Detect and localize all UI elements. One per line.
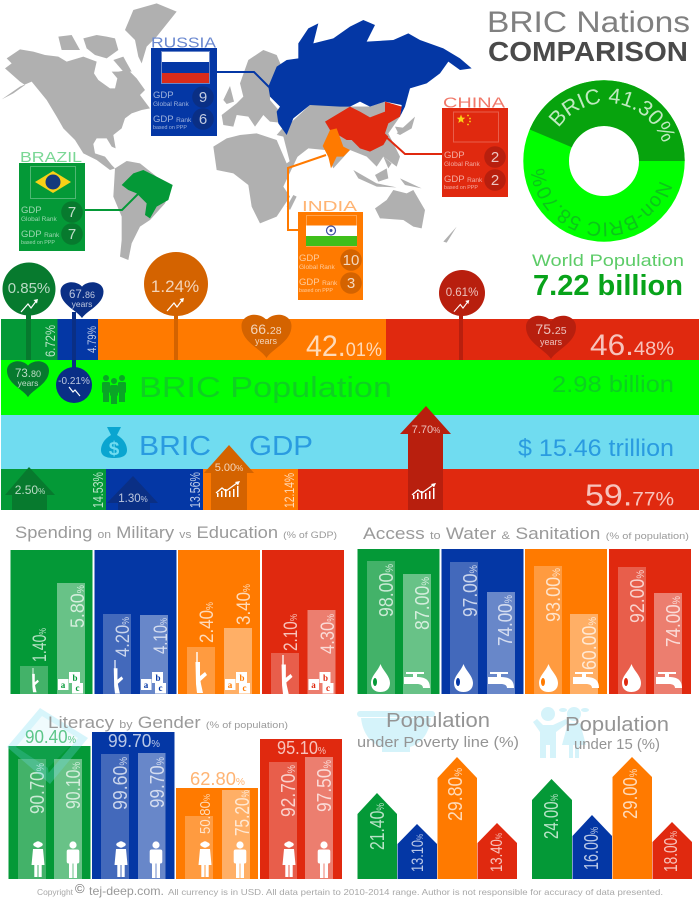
GDP growth arrow: Brazil	[5, 467, 55, 510]
life expectancy heart: China: 75.25	[535, 321, 567, 337]
chart: population under 15: 24.00%	[541, 794, 563, 839]
life expectancy heart: Brazil: years	[18, 378, 38, 388]
panel: military vs education spending: 3.40%	[234, 584, 255, 625]
card: India: 10	[343, 252, 359, 269]
icon: abc blocks Brazil: a	[61, 680, 66, 690]
icon: abc blocks China: b	[323, 673, 328, 683]
footer: All currency is in USD. All data pertain to 2010-2014 range. Author is not responsible for accuracy of data presented.	[168, 887, 663, 897]
icon: abc blocks India: b	[239, 673, 245, 683]
title	[487, 6, 690, 67]
chart: population under 15: 18.00%	[661, 831, 681, 872]
card: Russia: based on PPP	[153, 125, 187, 131]
world population total: World Population	[532, 252, 684, 270]
life expectancy heart: Russia	[60, 282, 104, 368]
world population total	[532, 252, 684, 302]
GDP growth arrow: Russia	[107, 476, 158, 510]
card: Russia: Global Rank	[153, 101, 190, 108]
GDP share bar: 13.56%	[187, 472, 204, 508]
panel: literacy by gender: 99.60%	[110, 757, 132, 810]
growth marker: China population: 0.61%	[446, 287, 478, 299]
card: China	[442, 96, 508, 197]
connector: China	[385, 136, 442, 154]
world map	[2, 3, 472, 260]
panel: military vs education spending: 2.40%	[197, 602, 218, 643]
icon: abc blocks India: a	[228, 680, 233, 690]
panel: literacy by gender: 90.10%	[63, 762, 85, 809]
panel: water and sanitation access: 98.00%	[376, 564, 398, 617]
world population total: 7.22 billion	[533, 270, 683, 302]
Brazil territory	[122, 170, 173, 218]
life expectancy heart: China	[526, 316, 576, 359]
card: Russia: 9	[199, 89, 207, 106]
donut chart: world population share	[523, 80, 685, 242]
icon: children watermark	[533, 707, 589, 758]
flag: Brazil	[30, 166, 76, 198]
panel: water and sanitation access: 92.00%	[627, 570, 649, 623]
heading: poverty	[357, 710, 519, 751]
footer: tej-deep.com.	[89, 884, 164, 898]
life expectancy heart: India: 66.28	[250, 321, 282, 337]
panel: literacy by gender: 99.70%	[147, 757, 169, 808]
chart: population under poverty line	[358, 757, 517, 879]
band: BRIC GDP: $ 15.46 trillion	[518, 435, 674, 462]
life expectancy heart: Russia: 67.86	[69, 289, 95, 301]
card: Russia: GDP Rank	[153, 114, 192, 125]
panel: water and sanitation access: 93.00%	[543, 568, 565, 622]
icon: abc blocks India	[225, 672, 250, 694]
icon: bowl watermark	[357, 711, 435, 752]
card: India: GDP	[299, 253, 320, 264]
icon: abc blocks Brazil: c	[76, 683, 80, 693]
card: China: based on PPP	[444, 185, 478, 191]
chart: population under 15: 16.00%	[581, 827, 603, 870]
panel: military vs education spending: 4.10%	[151, 618, 172, 654]
footer: ©	[75, 881, 85, 896]
band: BRIC population	[1, 360, 699, 415]
donut chart: world population share: BRIC 41.30%	[548, 88, 675, 142]
card: China: GDP	[444, 150, 465, 161]
card: Brazil: 7	[68, 204, 76, 221]
icon: abc blocks India: c	[242, 683, 246, 693]
icon: drop and tap Brazil	[371, 664, 430, 692]
card: China: 2	[491, 172, 499, 189]
heading: under 15	[565, 714, 669, 753]
growth marker: Russia population: -0.21%	[58, 376, 90, 387]
card: India: GDP Rank	[299, 277, 338, 288]
life expectancy heart: Brazil	[7, 361, 49, 397]
card: Brazil: BRAZIL	[20, 150, 82, 166]
growth marker: India population	[144, 252, 208, 360]
GDP share bar: 12.14%	[281, 473, 297, 508]
population share bar: 42.01%	[306, 330, 382, 363]
icon: abc blocks China	[308, 672, 334, 694]
heading: poverty: under Poverty line (%)	[357, 734, 519, 751]
population share bar: 6.72%	[42, 325, 58, 357]
chart: population under poverty line: 29.80%	[445, 768, 467, 821]
growth marker: China population	[439, 270, 485, 360]
connector: India	[288, 155, 326, 230]
panel: literacy by gender: 95.10%	[277, 738, 326, 758]
growth marker: Brazil population	[2, 262, 56, 360]
connector: Russia	[217, 72, 269, 87]
heading: literacy: Literacy by Gender (% of population)	[48, 714, 288, 732]
GDP growth arrow: China: 7.70%	[412, 424, 440, 436]
card: Brazil: 7	[68, 226, 76, 243]
icon: people	[102, 375, 126, 404]
footer: Copyright	[37, 888, 74, 897]
card: India: based on PPP	[299, 288, 333, 294]
panel: military vs education spending: 2.10%	[281, 614, 302, 651]
population share bar: 46.48%	[590, 329, 674, 362]
card: Russia: GDP	[153, 90, 174, 101]
icon: abc blocks Russia: a	[144, 680, 149, 690]
card: China: Global Rank	[444, 161, 481, 168]
icon: abc blocks Brazil: b	[72, 673, 78, 683]
icon: money bag	[101, 427, 127, 460]
life expectancy heart: India	[242, 315, 292, 358]
icon: abc blocks Russia: b	[155, 673, 161, 683]
GDP share bar	[1, 469, 699, 512]
GDP share bar: 59.77%	[585, 478, 674, 512]
life expectancy heart: Brazil: 73.80	[15, 368, 41, 380]
flag: India	[306, 216, 357, 246]
panel: water and sanitation access: 74.00%	[663, 596, 685, 647]
card: China: 2	[491, 149, 499, 166]
panel: literacy by gender: 90.40%	[25, 727, 76, 747]
Russia territory	[268, 20, 472, 135]
panel: literacy by gender: 92.70%	[278, 765, 300, 817]
card: India: INDIA	[302, 199, 357, 215]
panel: water and sanitation access: 97.00%	[460, 565, 482, 617]
India territory	[323, 128, 350, 168]
GDP growth arrow: India: 5.00%	[215, 462, 243, 474]
card: Russia: RUSSIA	[151, 36, 216, 52]
heading: poverty: Population	[386, 710, 490, 732]
heading: under 15: Population	[565, 714, 669, 736]
GDP growth arrow: Russia: 1.30%	[118, 493, 148, 505]
band: BRIC GDP	[1, 415, 699, 469]
GDP share bar: 14.53%	[90, 472, 107, 508]
icon: abc blocks Brazil	[58, 672, 83, 694]
panel: water and sanitation access	[358, 549, 691, 694]
GDP growth arrow: Brazil: 2.50%	[15, 483, 45, 497]
icon: abc blocks Russia	[141, 672, 166, 694]
life expectancy heart: India: years	[255, 336, 278, 346]
chart: population under poverty line: 13.10%	[408, 834, 427, 872]
panel: literacy by gender: 62.80%	[190, 769, 245, 789]
population share bar	[1, 319, 699, 363]
GDP growth arrow: China	[400, 406, 451, 510]
panel: literacy by gender: 90.70%	[27, 763, 49, 814]
heading: water and sanitation: Access to Water & Sanitation (% of population)	[363, 525, 689, 543]
life expectancy heart: China: years	[540, 337, 562, 347]
icon: drop and tap Russia	[454, 664, 514, 692]
chart: population under 15: 29.00%	[620, 769, 642, 819]
heading: under 15: under 15 (%)	[574, 736, 660, 753]
title: COMPARISON	[488, 36, 688, 67]
panel: military vs education spending	[10, 550, 344, 694]
panel: military vs education spending: 4.20%	[113, 617, 134, 657]
panel: literacy by gender: 50.80%	[197, 794, 214, 834]
China territory	[325, 102, 402, 152]
flag: China	[454, 112, 498, 142]
panel: water and sanitation access: 60.00%	[579, 617, 601, 670]
icon: drop and tap India	[539, 664, 599, 692]
panel: literacy by gender: 99.70%	[108, 731, 160, 751]
icon: book watermark	[7, 708, 88, 784]
chart: population under poverty line: 21.40%	[367, 803, 389, 850]
flag: Russia	[162, 52, 210, 84]
card: Brazil: Global Rank	[21, 216, 58, 223]
icon: abc blocks China: a	[311, 680, 316, 690]
band: BRIC population: 2.98 billion	[552, 371, 674, 397]
band: BRIC GDP: BRIC	[139, 430, 211, 461]
card: China: GDP Rank	[444, 174, 483, 185]
panel: literacy by gender: 75.20%	[232, 790, 254, 836]
chart: population under 15	[532, 757, 692, 879]
band: BRIC GDP: GDP	[249, 430, 313, 461]
card: Russia: 6	[199, 111, 207, 128]
card: China: CHINA	[443, 96, 505, 112]
band: BRIC population: BRIC Population	[139, 372, 392, 404]
growth marker: Brazil population: 0.85%	[8, 280, 50, 297]
panel: literacy by gender: 97.50%	[314, 760, 336, 812]
card: Brazil: GDP Rank	[21, 229, 60, 240]
growth marker: India population: 1.24%	[151, 277, 199, 296]
card: Brazil	[19, 150, 85, 251]
footer	[37, 881, 663, 898]
icon: abc blocks Russia: c	[158, 683, 162, 693]
population share bar: 4.79%	[85, 326, 99, 353]
panel: military vs education spending: 4.30%	[318, 614, 339, 654]
life expectancy heart: Russia: years	[72, 299, 92, 309]
icon: drop and tap China	[622, 664, 682, 692]
card: India: Global Rank	[299, 264, 336, 271]
donut chart: world population share: Non-BRIC 58.70%	[531, 168, 672, 236]
panel: military vs education spending: 1.40%	[30, 628, 51, 662]
card: India: 3	[347, 275, 355, 292]
panel: military vs education spending: 5.80%	[68, 585, 89, 628]
connector: Brazil	[85, 192, 140, 210]
title: BRIC Nations	[487, 6, 690, 39]
card: Brazil: based on PPP	[21, 240, 55, 246]
panel: literacy by gender	[8, 727, 342, 879]
chart: population under poverty line: 13.40%	[487, 833, 506, 872]
card: India	[298, 199, 363, 300]
icon: abc blocks China: c	[326, 683, 330, 693]
growth marker: Russia population	[56, 367, 92, 403]
icon: money bag: $	[109, 439, 120, 460]
panel: water and sanitation access: 74.00%	[495, 595, 517, 646]
card: Russia	[151, 36, 217, 136]
GDP growth arrow: India	[204, 445, 254, 510]
panel: water and sanitation access: 87.00%	[412, 577, 434, 630]
heading: spending: Spending on Military vs Education (% of GDP)	[15, 524, 337, 542]
card: Brazil: GDP	[21, 205, 42, 216]
